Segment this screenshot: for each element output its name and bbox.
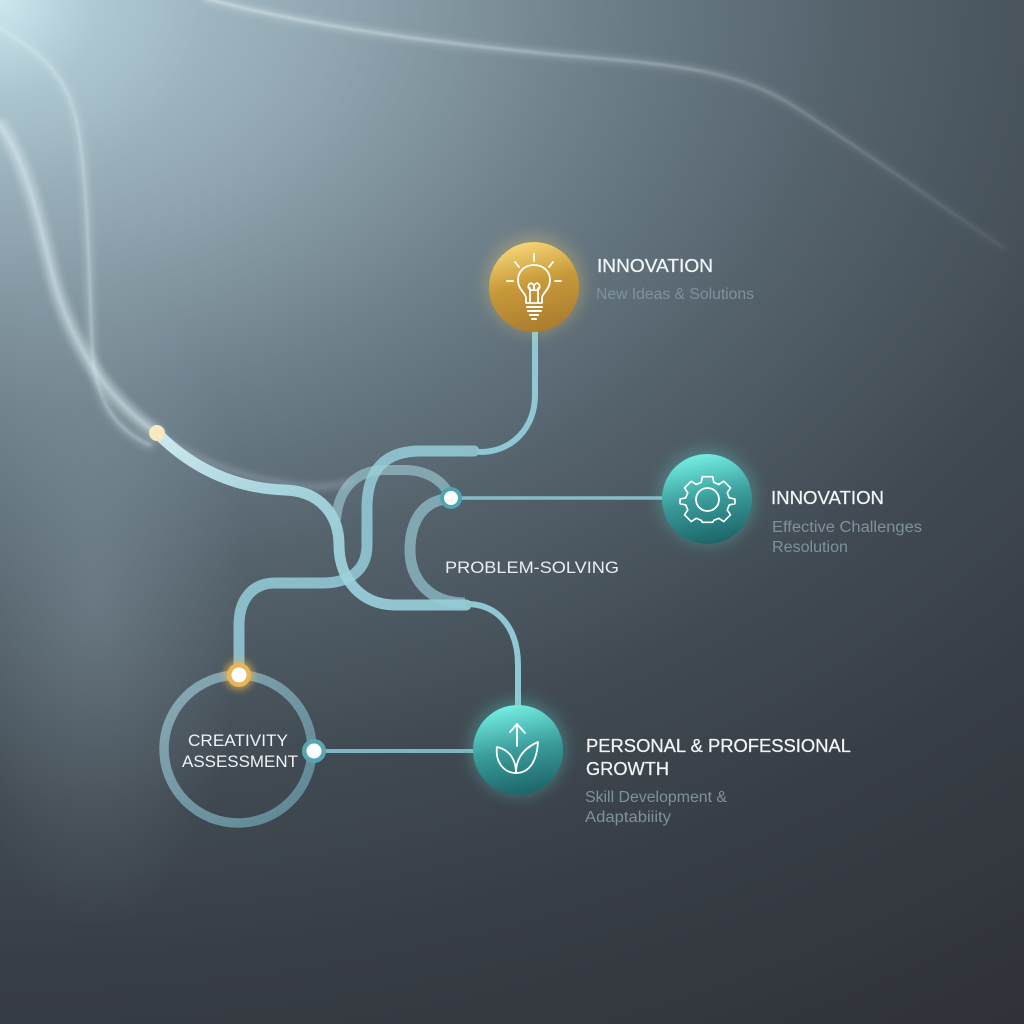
gold node on ring [224,660,254,690]
label: innovation (ideas): INNOVATION [597,256,713,276]
label: innovation (ideas): New Ideas & Solutions [596,286,754,303]
connector: main flow from start node [160,436,518,706]
teal node on ring [302,739,326,763]
label: personal and professional growth: PERSONAL & PROFESSIONAL [586,736,851,756]
icon: gear circle [659,449,755,545]
label: personal and professional growth [585,736,851,826]
problem-solving node [440,487,462,509]
label: personal and professional growth: Skill Development & [585,789,728,806]
label: problem-solving: PROBLEM-SOLVING [445,558,619,577]
label: innovation (ideas) [596,256,754,303]
connector: to innovation bulb [239,332,535,675]
connector: loop to problem-solving node [336,470,465,603]
assessment ring [164,675,312,823]
start node [149,425,165,441]
connector: assessment to growth [320,749,476,753]
icon: plant circle [470,700,566,796]
assessment label: CREATIVITY [188,732,288,750]
assessment label: ASSESSMENT [182,753,298,771]
label: personal and professional growth: GROWTH [586,759,669,779]
connector: problem-solving to gear [460,496,664,500]
label: innovation (challenges) [771,488,922,556]
label: innovation (challenges): INNOVATION [771,488,884,508]
label: personal and professional growth: Adaptabiiity [585,809,671,826]
assessment label [182,732,298,771]
label: innovation (challenges): Effective Challenges [772,519,922,536]
light wisps [0,0,1004,487]
icon: lightbulb circle [485,235,583,333]
label: innovation (challenges): Resolution [772,539,848,556]
